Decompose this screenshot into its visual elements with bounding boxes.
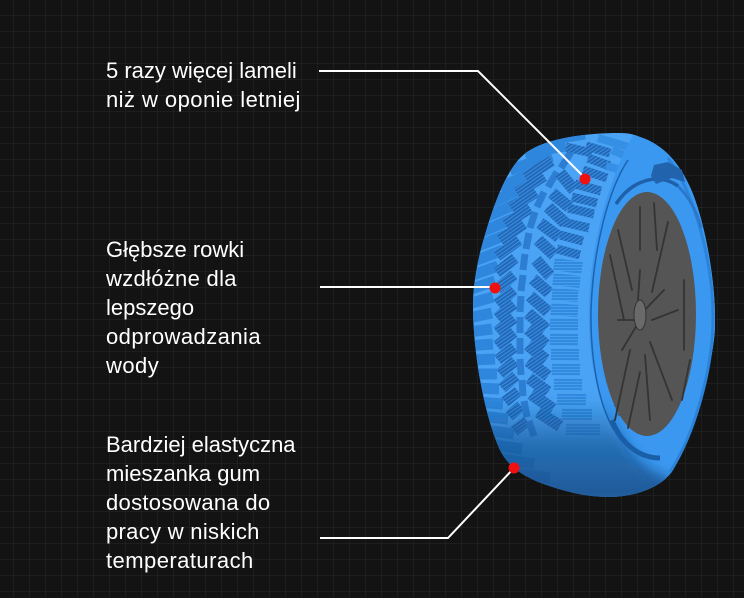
red dot: middle (490, 282, 500, 294)
text: elastic rubber compound: mieszanka gum (106, 461, 260, 486)
left chevron blocks (497, 161, 552, 431)
sidewall band (589, 134, 715, 487)
tire (472, 133, 715, 497)
callout line: bottom (320, 468, 514, 538)
text: elastic rubber compound: temperaturach (106, 548, 254, 573)
text: elastic rubber compound: Bardziej elastyczna (106, 432, 296, 457)
right chevron blocks (528, 173, 574, 426)
text: more sipes (106, 58, 301, 112)
brand plate (651, 162, 685, 184)
text: elastic rubber compound: pracy w niskich (106, 519, 260, 544)
text: more sipes: 5 razy więcej lameli (106, 58, 297, 83)
text: deeper grooves: wody (106, 353, 159, 378)
red dot: top (580, 174, 590, 184)
wheel opening (598, 192, 696, 436)
center column blocks (520, 152, 571, 436)
tread pattern (473, 134, 715, 497)
upper dark blocks (557, 146, 610, 255)
outer left tread rows (468, 134, 585, 478)
text: elastic rubber compound (106, 432, 296, 573)
callout line: top (319, 71, 585, 178)
groove along sidewall (591, 160, 628, 430)
wheel spokes (610, 203, 690, 428)
text: more sipes: niż w oponie letniej (106, 87, 301, 112)
outer right tread rows (550, 264, 600, 430)
text: elastic rubber compound: dostosowana do (106, 490, 270, 515)
rim shoulder lettering dark band (602, 162, 701, 458)
red dot: bottom (508, 462, 520, 474)
callout line: middle (320, 286, 494, 288)
text: deeper grooves: wzdłóżne dla (106, 266, 237, 291)
text: deeper grooves: Głębsze rowki (106, 237, 244, 262)
outer sidewall edge (668, 158, 713, 472)
text: deeper grooves: lepszego (106, 295, 194, 320)
hub (634, 300, 646, 330)
bottom shading (486, 405, 670, 497)
tire silhouette (473, 133, 715, 497)
text: deeper grooves: odprowadzania (106, 324, 261, 349)
top shoulder rows (598, 138, 632, 170)
text: deeper grooves (106, 237, 261, 378)
